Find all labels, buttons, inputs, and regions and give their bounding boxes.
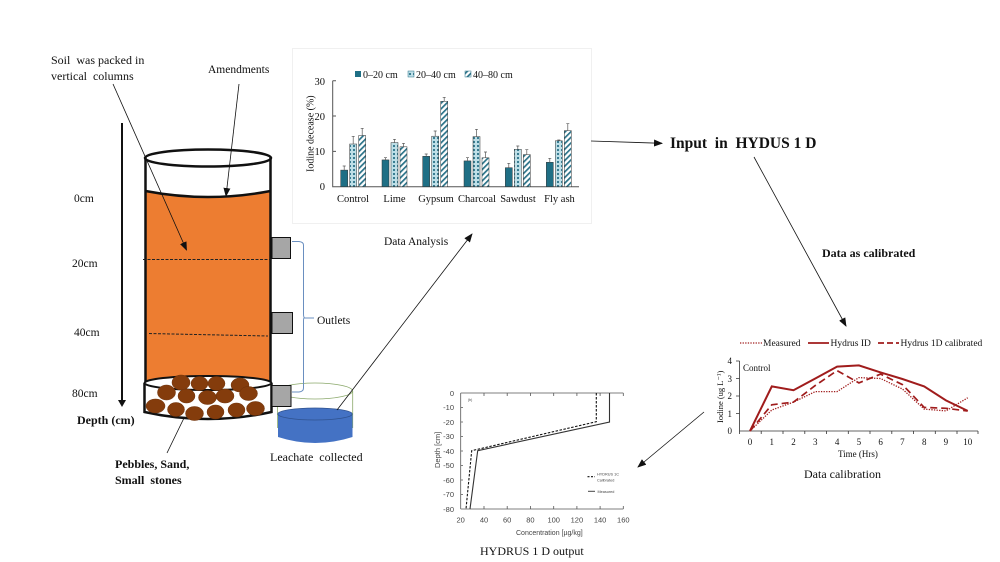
y tick labels: 20 xyxy=(314,112,325,123)
y axis title: Iodine decease (%) xyxy=(306,95,316,172)
column top rim xyxy=(145,150,271,166)
leachate collection beaker xyxy=(277,383,353,443)
leachate water xyxy=(278,414,352,443)
y tick labels: 0 xyxy=(320,182,325,193)
x tick labels: 7 xyxy=(900,437,905,447)
arrow: amendments xyxy=(226,84,239,196)
depth labels: 40cm xyxy=(74,327,100,339)
label: amendments: Amendments xyxy=(208,64,270,76)
x tick labels: 20 xyxy=(457,516,465,524)
y tick labels: -70 xyxy=(443,490,454,499)
depth labels xyxy=(72,193,100,400)
panel: bar chart xyxy=(292,48,592,224)
label: pebbles: Small stones xyxy=(115,473,182,487)
depth labels: 0cm xyxy=(74,193,94,205)
x tick labels: 0 xyxy=(748,437,753,447)
arrow: analysis to input xyxy=(591,141,662,143)
depth arrow xyxy=(121,123,123,402)
outlets bracket xyxy=(292,242,314,392)
outlets xyxy=(272,238,292,406)
soil fill xyxy=(146,192,270,384)
category labels: Control xyxy=(337,194,369,205)
panel tag: (b) xyxy=(468,398,472,402)
y tick labels: -40 xyxy=(443,447,454,456)
panel: hydrus output chart: Concentration [µg/kg] xyxy=(516,530,583,537)
arrow: input to calibration xyxy=(754,157,846,326)
x tick labels: 60 xyxy=(503,516,511,524)
label: pebbles: Pebbles, Sand, xyxy=(115,457,189,471)
y tick labels: -50 xyxy=(443,461,454,470)
y tick labels: 0 xyxy=(450,389,454,398)
y tick labels: -10 xyxy=(443,403,454,412)
y tick labels: 3 xyxy=(728,374,732,384)
x tick labels: 80 xyxy=(526,516,535,524)
x tick labels: 6 xyxy=(878,437,883,447)
arrow: soil xyxy=(113,84,186,250)
x tick labels: 120 xyxy=(571,516,583,524)
column walls xyxy=(146,157,270,384)
y tick labels: -30 xyxy=(443,432,454,441)
gravel layer xyxy=(144,375,272,420)
category labels: Gypsum xyxy=(418,194,454,205)
caption: data calibration: Data calibration xyxy=(804,467,881,481)
x tick labels: 160 xyxy=(617,516,630,524)
category labels: Lime xyxy=(383,194,406,205)
y tick labels: -80 xyxy=(443,505,454,514)
label: data as calibrated: Data as calibrated xyxy=(822,246,916,260)
legend xyxy=(588,472,619,494)
soil surface xyxy=(146,191,270,197)
line: measured xyxy=(750,378,968,431)
legend: Hydrus ID xyxy=(830,339,871,349)
arrow: leachate to analysis xyxy=(337,234,472,410)
category labels: Charcoal xyxy=(458,194,496,205)
y tick labels: 30 xyxy=(314,77,325,88)
beaker xyxy=(278,391,353,428)
legend: HYDRUS 1C xyxy=(597,472,619,476)
y tick labels: -60 xyxy=(443,476,454,485)
y tick labels: -20 xyxy=(443,418,454,427)
y tick labels xyxy=(728,356,732,436)
axes xyxy=(461,393,623,509)
category labels: Sawdust xyxy=(500,194,536,205)
x tick labels: 140 xyxy=(594,516,606,524)
legend: 20–40 cm xyxy=(416,70,456,81)
line: calibrated xyxy=(466,393,596,509)
depth lines xyxy=(143,260,271,336)
axis titles: Depth [cm] xyxy=(433,432,442,468)
y tick labels: 2 xyxy=(728,391,732,401)
legend: Measured xyxy=(763,339,801,349)
label: outlets: Outlets xyxy=(317,315,351,327)
arrow: pebbles line xyxy=(167,418,184,453)
label: leachate: Leachate collected xyxy=(270,450,363,464)
depth axis title: Depth (cm) xyxy=(77,413,135,427)
bars xyxy=(341,101,571,187)
depth labels: 20cm xyxy=(72,258,98,270)
legend: Calibrated xyxy=(597,478,614,482)
label: soil: vertical columns xyxy=(51,69,134,83)
error bars xyxy=(343,97,569,170)
x tick labels: 1 xyxy=(770,437,774,447)
axes xyxy=(736,361,978,434)
heading: input: Input in HYDUS 1 D xyxy=(670,135,816,152)
legend xyxy=(740,339,983,349)
soil column diagram xyxy=(143,150,314,420)
y axis xyxy=(333,81,579,187)
legend: 0–20 cm xyxy=(363,70,398,81)
caption: data analysis: Data Analysis xyxy=(384,236,449,248)
panel: line chart: Time (Hrs) xyxy=(838,449,878,459)
legend: 40–80 cm xyxy=(473,70,513,81)
x tick labels: 9 xyxy=(944,437,949,447)
x tick labels: 8 xyxy=(922,437,927,447)
y tick labels: 4 xyxy=(728,356,732,366)
x tick labels: 100 xyxy=(547,516,560,524)
x tick labels xyxy=(748,437,973,447)
depth arrowhead xyxy=(118,400,126,407)
x tick labels: 5 xyxy=(857,437,862,447)
arrow: calibration to output xyxy=(638,412,704,467)
line: calibrated xyxy=(750,371,968,431)
category labels: Fly ash xyxy=(544,194,576,205)
line: hydrus xyxy=(750,365,968,431)
x tick labels: 2 xyxy=(791,437,796,447)
x tick labels: 40 xyxy=(480,516,488,524)
y tick labels xyxy=(314,77,325,193)
panel: hydrus output chart xyxy=(433,389,630,537)
axis titles: Iodine (ug L⁻¹) xyxy=(715,370,725,423)
x tick labels: 4 xyxy=(835,437,840,447)
caption: hydrus output: HYDRUS 1 D output xyxy=(480,544,584,558)
legend: Hydrus 1D calibrated xyxy=(900,339,983,349)
legend: Measured xyxy=(598,490,614,494)
depth labels: 80cm xyxy=(72,388,98,400)
label: soil: Soil was packed in xyxy=(51,53,144,67)
x tick labels: 10 xyxy=(963,437,973,447)
panel: line chart xyxy=(715,339,983,459)
x tick labels: 3 xyxy=(813,437,818,447)
category labels xyxy=(337,194,576,205)
line: measured xyxy=(470,393,610,509)
y tick labels: 10 xyxy=(314,147,325,158)
y tick labels: 0 xyxy=(728,426,732,436)
legend xyxy=(355,70,513,81)
panel tag: Control xyxy=(743,363,771,373)
y tick labels xyxy=(443,389,454,514)
x tick labels xyxy=(457,516,630,524)
y tick labels: 1 xyxy=(728,409,732,419)
